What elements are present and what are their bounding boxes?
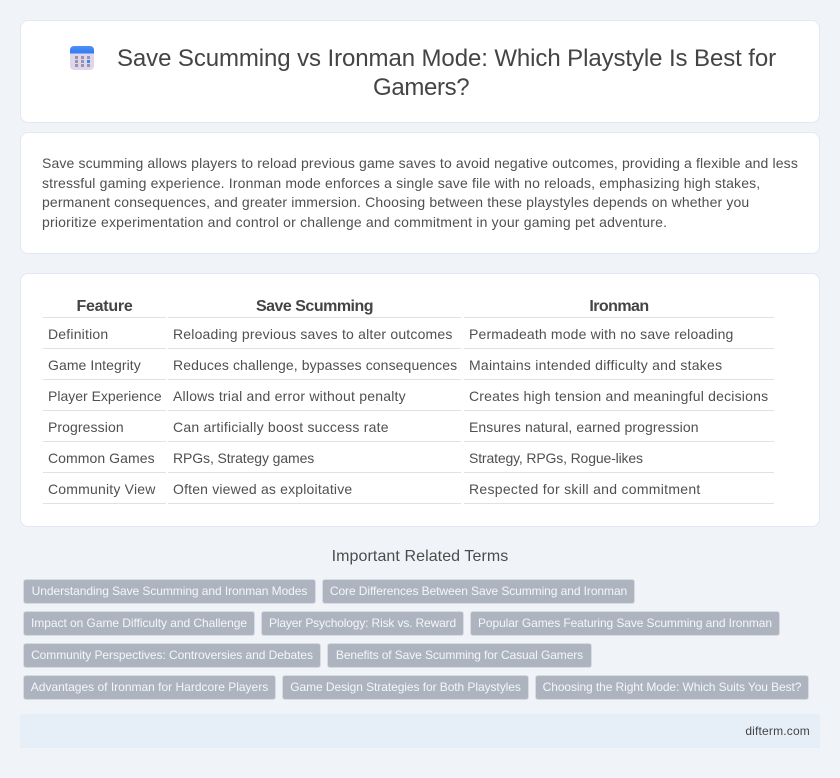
intro text: Save scumming allows players to reload previous game saves to avoid negative outcomes, providing a flexible and less bbox=[42, 155, 798, 171]
tag: Popular Games Featuring Save Scumming and Ironman bbox=[478, 616, 772, 630]
intro text bbox=[42, 155, 798, 230]
row: game integrity: Game Integrity bbox=[48, 357, 141, 373]
row: community view: Community View bbox=[48, 481, 156, 497]
row: common games: RPGs, Strategy games bbox=[173, 450, 314, 466]
tag: Core Differences Between Save Scumming and Ironman bbox=[330, 584, 627, 598]
row: progression: Progression bbox=[48, 419, 124, 435]
row: community view bbox=[43, 481, 774, 504]
table header bbox=[43, 298, 774, 318]
tag bbox=[23, 643, 321, 668]
row: common games: Strategy, RPGs, Rogue-likes bbox=[469, 450, 643, 466]
tag bbox=[282, 675, 529, 700]
row: definition bbox=[43, 326, 774, 349]
footer bbox=[20, 714, 820, 748]
row: progression: Ensures natural, earned progression bbox=[469, 419, 699, 435]
table header: Ironman bbox=[589, 298, 649, 315]
table header: Save Scumming bbox=[256, 298, 373, 315]
row: definition: Reloading previous saves to alter outcomes bbox=[173, 326, 453, 342]
tag: Community Perspectives: Controversies and Debates bbox=[31, 648, 313, 662]
title bbox=[117, 45, 776, 101]
row: player experience bbox=[43, 388, 774, 411]
tag: Understanding Save Scumming and Ironman Modes bbox=[32, 584, 307, 598]
table header: Feature bbox=[76, 298, 133, 315]
tag bbox=[23, 675, 276, 700]
related terms tags bbox=[23, 579, 809, 700]
tag bbox=[23, 611, 255, 636]
tag bbox=[535, 675, 809, 700]
row: community view: Respected for skill and commitment bbox=[469, 481, 701, 497]
icon: calendar bbox=[70, 46, 94, 70]
related terms heading: Important Related Terms bbox=[332, 548, 508, 565]
title panel bbox=[20, 20, 820, 123]
comparison table bbox=[43, 298, 774, 504]
tag: Player Psychology: Risk vs. Reward bbox=[269, 616, 456, 630]
tag: Impact on Game Difficulty and Challenge bbox=[31, 616, 247, 630]
tag bbox=[470, 611, 780, 636]
table panel bbox=[20, 273, 820, 527]
tag: Game Design Strategies for Both Playstyles bbox=[290, 680, 521, 694]
row: game integrity: Maintains intended difficulty and stakes bbox=[469, 357, 722, 373]
tag bbox=[23, 579, 316, 604]
intro text: prioritize experimentation and control or challenge and commitment in your gaming pet adventure. bbox=[42, 214, 667, 230]
row: definition: Definition bbox=[48, 326, 108, 342]
tag: Choosing the Right Mode: Which Suits You Best? bbox=[543, 680, 801, 694]
row: player experience: Creates high tension and meaningful decisions bbox=[469, 388, 768, 404]
tag bbox=[327, 643, 592, 668]
row: definition: Permadeath mode with no save reloading bbox=[469, 326, 733, 342]
row: progression: Can artificially boost success rate bbox=[173, 419, 389, 435]
tag bbox=[322, 579, 635, 604]
tag bbox=[261, 611, 464, 636]
title: Gamers? bbox=[373, 74, 469, 101]
row: community view: Often viewed as exploitative bbox=[173, 481, 352, 497]
footer domain: difterm.com bbox=[745, 724, 810, 738]
row: player experience: Player Experience bbox=[48, 388, 162, 404]
intro text: permanent consequences, and greater immersion. Choosing between these playstyles depends on whether you bbox=[42, 194, 749, 210]
row: progression bbox=[43, 419, 774, 442]
row: game integrity: Reduces challenge, bypasses consequences bbox=[173, 357, 457, 373]
intro panel bbox=[20, 132, 820, 254]
title: Save Scumming vs Ironman Mode: Which Playstyle Is Best for bbox=[117, 45, 776, 72]
tag: Benefits of Save Scumming for Casual Gamers bbox=[336, 648, 583, 662]
row: common games bbox=[43, 450, 774, 473]
row: player experience: Allows trial and error without penalty bbox=[173, 388, 406, 404]
intro text: stressful gaming experience. Ironman mode enforces a single save file with no reloads, emphasizing high stakes, bbox=[42, 175, 760, 191]
row: common games: Common Games bbox=[48, 450, 155, 466]
row: game integrity bbox=[43, 357, 774, 380]
tag: Advantages of Ironman for Hardcore Players bbox=[31, 680, 268, 694]
